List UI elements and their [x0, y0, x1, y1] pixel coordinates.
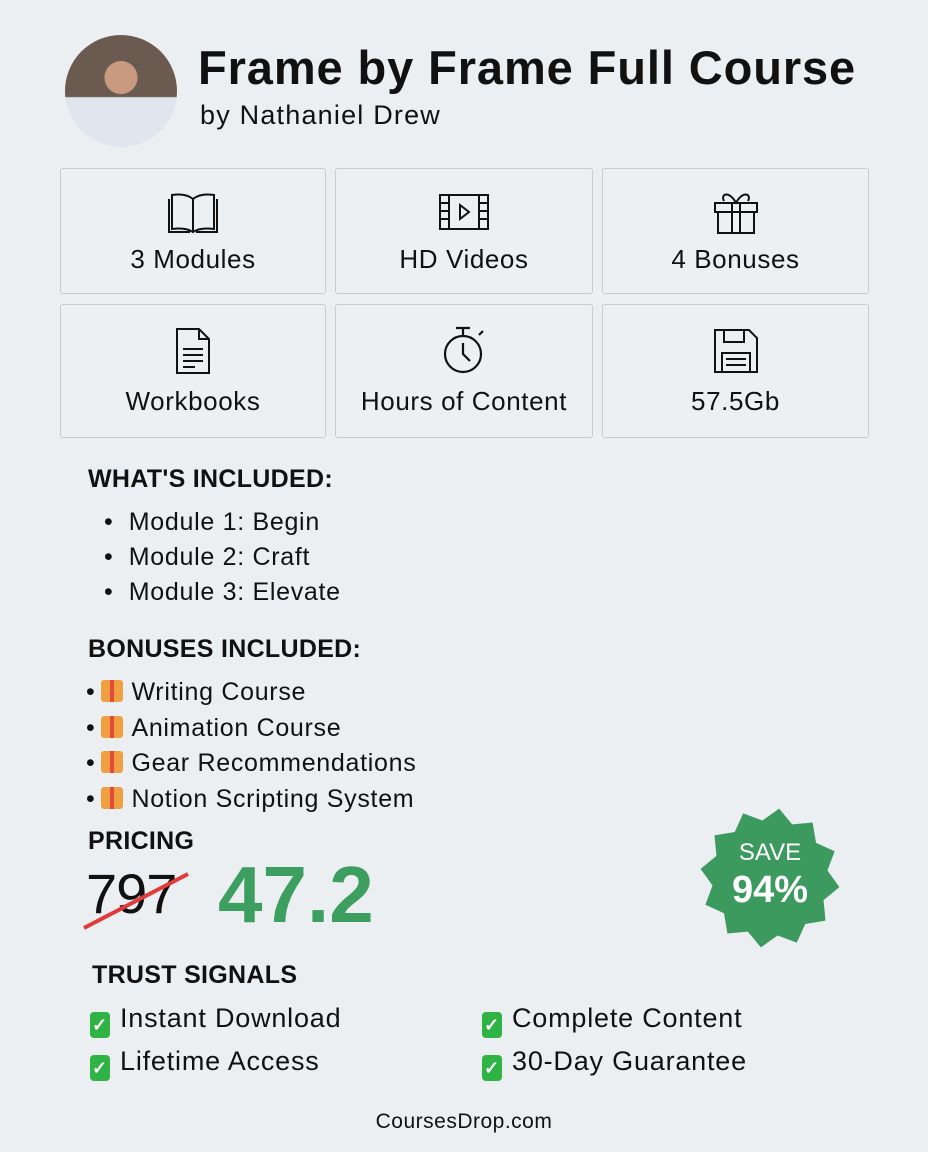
trust items: ✓ — [484, 1015, 500, 1035]
trust items: Lifetime Access — [120, 1046, 320, 1076]
list: bonuses: • Writing Course — [86, 678, 306, 706]
old price: 797 — [86, 862, 176, 925]
card: Hours of Content — [335, 304, 593, 438]
heading: trust signals: TRUST SIGNALS — [92, 961, 297, 989]
trust items: ✓ — [92, 1058, 108, 1078]
icon: document — [176, 328, 210, 374]
trust items: ✓ — [92, 1015, 108, 1035]
icon: film — [439, 194, 489, 230]
list: modules: • Module 3: Elevate — [104, 578, 341, 606]
card: Workbooks: Workbooks — [126, 386, 260, 416]
icon: stopwatch — [444, 326, 484, 374]
card: 3 Modules — [60, 168, 326, 294]
list: modules: • Module 2: Craft — [104, 543, 310, 571]
list: bonuses: • Notion Scripting System — [86, 784, 414, 812]
card: HD Videos — [335, 168, 593, 294]
trust items: 30-Day Guarantee — [512, 1046, 747, 1076]
icon: floppy disk — [714, 329, 758, 373]
card: 4 Bonuses: 4 Bonuses — [671, 244, 800, 274]
badge: save 94%: SAVE — [739, 839, 801, 866]
icon: book — [168, 194, 218, 234]
heading: what's included: WHAT'S INCLUDED: — [88, 465, 333, 493]
subtitle: by Nathaniel Drew — [200, 100, 441, 130]
trust items: Complete Content — [512, 1003, 742, 1033]
list: bonuses: • Gear Recommendations — [86, 749, 416, 777]
heading: pricing: PRICING — [88, 827, 194, 855]
card: HD Videos: HD Videos — [399, 244, 529, 274]
icon: gift — [714, 194, 758, 234]
card: 57.5Gb: 57.5Gb — [691, 386, 780, 416]
list: bonuses — [86, 678, 416, 812]
badge: save 94%: 94% — [732, 869, 808, 911]
title: Frame by Frame Full Course — [198, 41, 856, 94]
heading: bonuses: BONUSES INCLUDED: — [88, 635, 361, 663]
new price: 47.2 — [218, 850, 374, 939]
list: bonuses: • Animation Course — [86, 714, 341, 742]
list: modules: • Module 1: Begin — [104, 508, 320, 536]
avatar — [65, 35, 177, 147]
badge: save 94% — [700, 808, 840, 948]
trust items: Instant Download — [120, 1003, 341, 1033]
card: Hours of Content: Hours of Content — [361, 386, 567, 416]
trust items: ✓ — [484, 1058, 500, 1078]
footer: CoursesDrop.com — [376, 1110, 552, 1133]
card: 3 Modules: 3 Modules — [130, 244, 256, 274]
card: 57.5Gb — [602, 304, 869, 438]
card: 4 Bonuses — [602, 168, 869, 294]
trust items — [90, 1003, 747, 1081]
list: modules — [104, 508, 341, 606]
card: Workbooks — [60, 304, 326, 438]
